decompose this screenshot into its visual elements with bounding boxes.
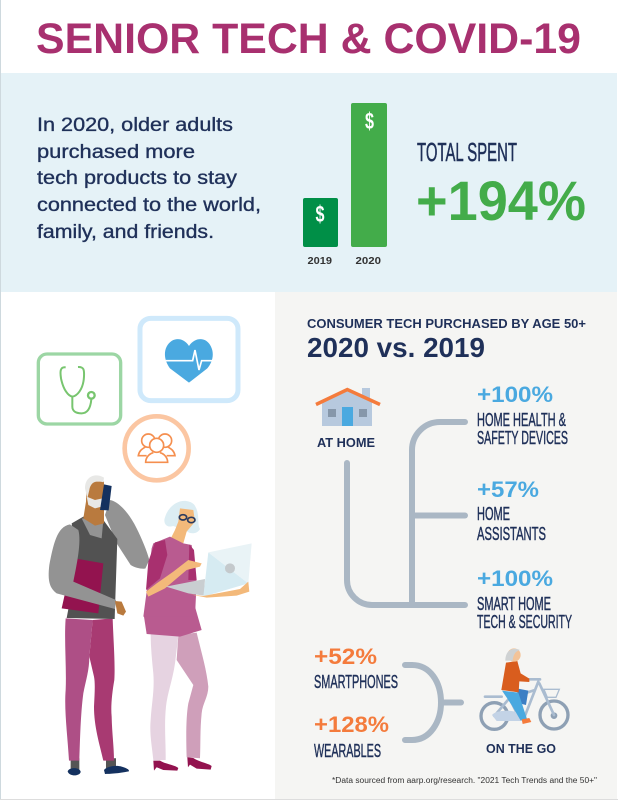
at home label: AT HOME — [317, 436, 375, 450]
bar chart: spending 2019 vs 2020: $ — [316, 201, 325, 227]
stat: smart home — [477, 566, 572, 632]
intro text: purchased more — [37, 142, 195, 163]
stat: home health and safety: +100% — [477, 382, 553, 407]
panel: illustration — [0, 292, 275, 800]
icon: stethoscope — [38, 354, 121, 424]
on the go label: ON THE GO — [486, 742, 556, 756]
stat: smartphones: +52% — [314, 644, 377, 669]
total spent label: TOTAL SPENT — [417, 137, 517, 167]
intro text — [37, 115, 261, 243]
stat: smart home: SMART HOME — [477, 593, 551, 614]
section subheading: 2020 vs. 2019 — [307, 332, 485, 363]
stat: wearables: WEARABLES — [314, 740, 381, 761]
intro text: tech products to stay — [37, 168, 238, 189]
woman upper body with laptop — [143, 501, 252, 617]
intro text: connected to the world, — [37, 195, 261, 216]
connector: on the go bracket — [405, 665, 461, 740]
icon: people — [125, 416, 189, 480]
man upper body — [49, 475, 149, 619]
bar chart: spending 2019 vs 2020 — [303, 103, 387, 267]
panel: total spent band — [0, 73, 618, 292]
stat: home health and safety — [477, 382, 568, 448]
bar chart: spending 2019 vs 2020: 2019 — [308, 256, 332, 267]
intro text: family, and friends. — [37, 222, 214, 243]
icon: house — [316, 388, 380, 426]
connector: at home tree — [347, 422, 465, 605]
stat: home assistants: ASSISTANTS — [477, 523, 546, 544]
title: SENIOR TECH & COVID-19 — [36, 15, 581, 63]
stat: smartphones — [314, 644, 398, 692]
stat: home assistants: HOME — [477, 503, 510, 524]
section heading: CONSUMER TECH PURCHASED BY AGE 50+ — [307, 317, 586, 331]
total spent figure: +194% — [416, 169, 586, 232]
stat: smart home: +100% — [477, 566, 553, 591]
man lower body — [65, 618, 129, 775]
stat: wearables — [314, 712, 389, 761]
bar chart: spending 2019 vs 2020: 2020 — [356, 256, 381, 267]
icon: woman on bicycle — [481, 648, 568, 729]
stat: smartphones: SMARTPHONES — [314, 671, 398, 692]
stat: wearables: +128% — [314, 712, 389, 737]
panel: consumer tech — [275, 292, 618, 800]
stat: home assistants — [477, 477, 546, 544]
stat: home assistants: +57% — [477, 477, 539, 502]
icon: heart monitor — [140, 318, 238, 401]
bar chart: spending 2019 vs 2020: $ — [365, 108, 374, 134]
footnote: *Data sourced from aarp.org/research. "2021 Tech Trends and the 50+" — [332, 776, 597, 785]
woman lower body — [144, 583, 212, 771]
intro text: In 2020, older adults — [37, 115, 233, 136]
